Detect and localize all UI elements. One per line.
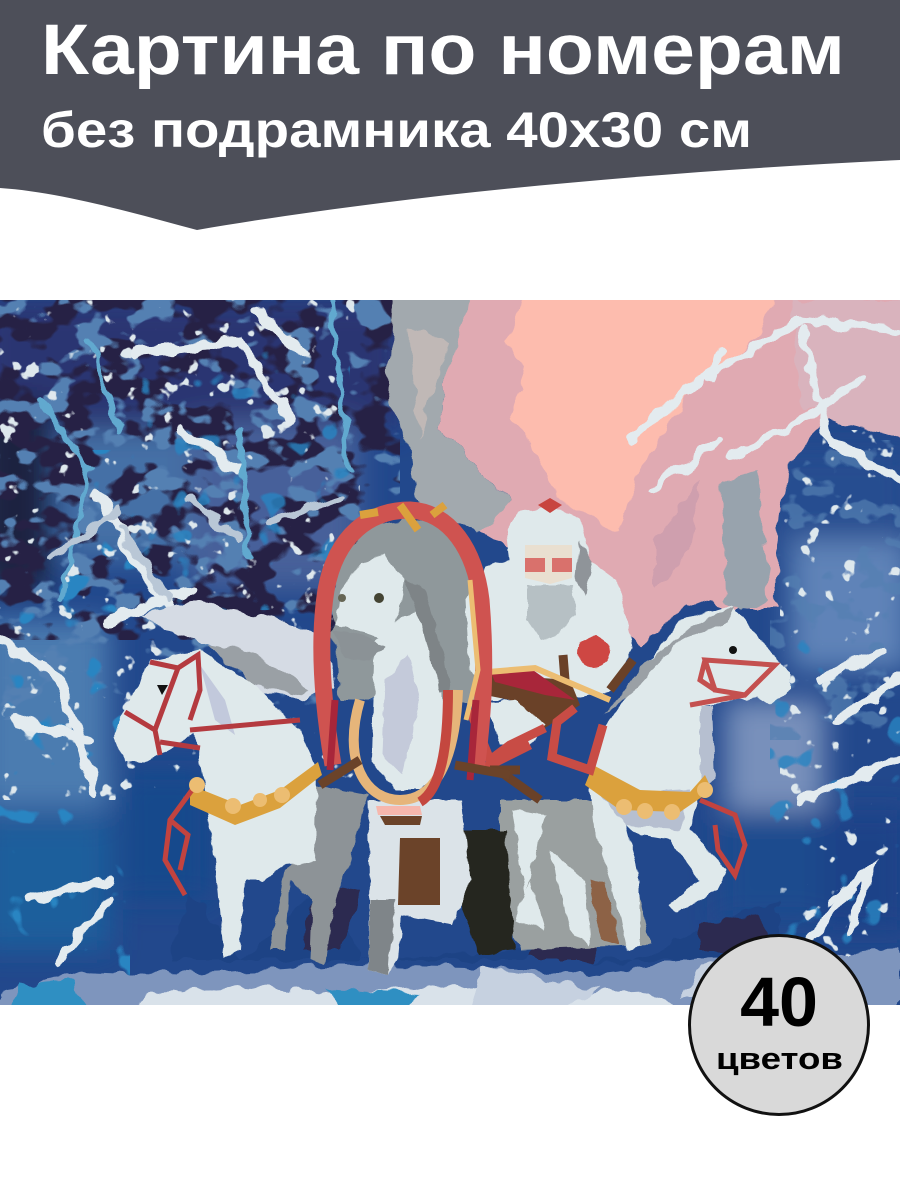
- centre horse collar: [354, 690, 458, 800]
- left horse bridle: [125, 655, 300, 755]
- right horse: [458, 605, 790, 955]
- left horse harness beads: [189, 777, 290, 814]
- santa shade: [575, 540, 592, 595]
- right horse beads: [616, 782, 713, 820]
- peach sun glow: [505, 290, 778, 530]
- santa robe: [465, 505, 633, 700]
- sleigh: [470, 655, 633, 800]
- centre horse leg shade: [368, 900, 395, 975]
- number of colours: 40: [740, 963, 818, 1041]
- santa face: [525, 545, 572, 584]
- collar bottom: [376, 806, 422, 815]
- sleigh wood: [475, 670, 580, 728]
- centre horse ear and mane: [405, 580, 450, 695]
- subtitle: без подрамника 40х30 см: [41, 102, 752, 158]
- wheel horses legs: [458, 800, 650, 955]
- left horse harness: [190, 762, 322, 825]
- santa mitten: [578, 636, 610, 668]
- colours label: цветов: [716, 1041, 843, 1076]
- centre horse legs and body: [368, 800, 470, 975]
- title: Картина по номерам: [41, 11, 845, 90]
- left horse eye: [157, 685, 168, 695]
- left horse: [113, 600, 368, 965]
- lower ground shadows: [303, 888, 781, 964]
- right horse harness: [585, 765, 712, 812]
- left horse neck shade: [200, 665, 235, 735]
- tan strap: [488, 668, 610, 700]
- pink sky: [440, 290, 900, 650]
- colour count badge: [690, 936, 868, 1114]
- right horse eye: [729, 646, 737, 654]
- centre neck shade: [382, 655, 420, 775]
- centre horse neck: [372, 610, 447, 790]
- collar outer shade: [420, 690, 448, 802]
- painting: [0, 290, 900, 1010]
- sleigh white fill: [485, 700, 545, 745]
- painting background forest: [0, 300, 900, 1005]
- right horse bridle: [690, 660, 775, 705]
- sleigh brown ring: [563, 655, 633, 690]
- right horse shade: [600, 705, 715, 830]
- santa hat tip: [538, 498, 562, 513]
- santa: [465, 498, 633, 700]
- santa beard: [527, 585, 576, 640]
- centre brown block: [398, 838, 440, 905]
- centre horse muzzle: [333, 630, 385, 660]
- header banner: [0, 0, 900, 230]
- red harness straps: [470, 708, 603, 770]
- centre horse head: [336, 555, 405, 640]
- left horse tassel: [165, 790, 192, 895]
- right horse tassel: [700, 800, 745, 875]
- centre horse: [333, 555, 470, 975]
- snowy branches: [0, 300, 900, 960]
- grey haze and distant trees: [390, 295, 768, 612]
- right horse mane: [605, 605, 735, 715]
- right horse body: [590, 605, 790, 950]
- brown straps: [490, 770, 540, 800]
- left horse hind quarters: [270, 785, 368, 965]
- grey area behind bow: [332, 520, 482, 700]
- left horse mane: [140, 600, 335, 700]
- shaft bow lower straps: [320, 760, 510, 785]
- centre horse eyes: [338, 594, 346, 602]
- left horse body: [113, 650, 317, 958]
- sleigh red cloth: [492, 671, 575, 700]
- shaft bow: [320, 505, 510, 785]
- snowy ground: [0, 950, 900, 1010]
